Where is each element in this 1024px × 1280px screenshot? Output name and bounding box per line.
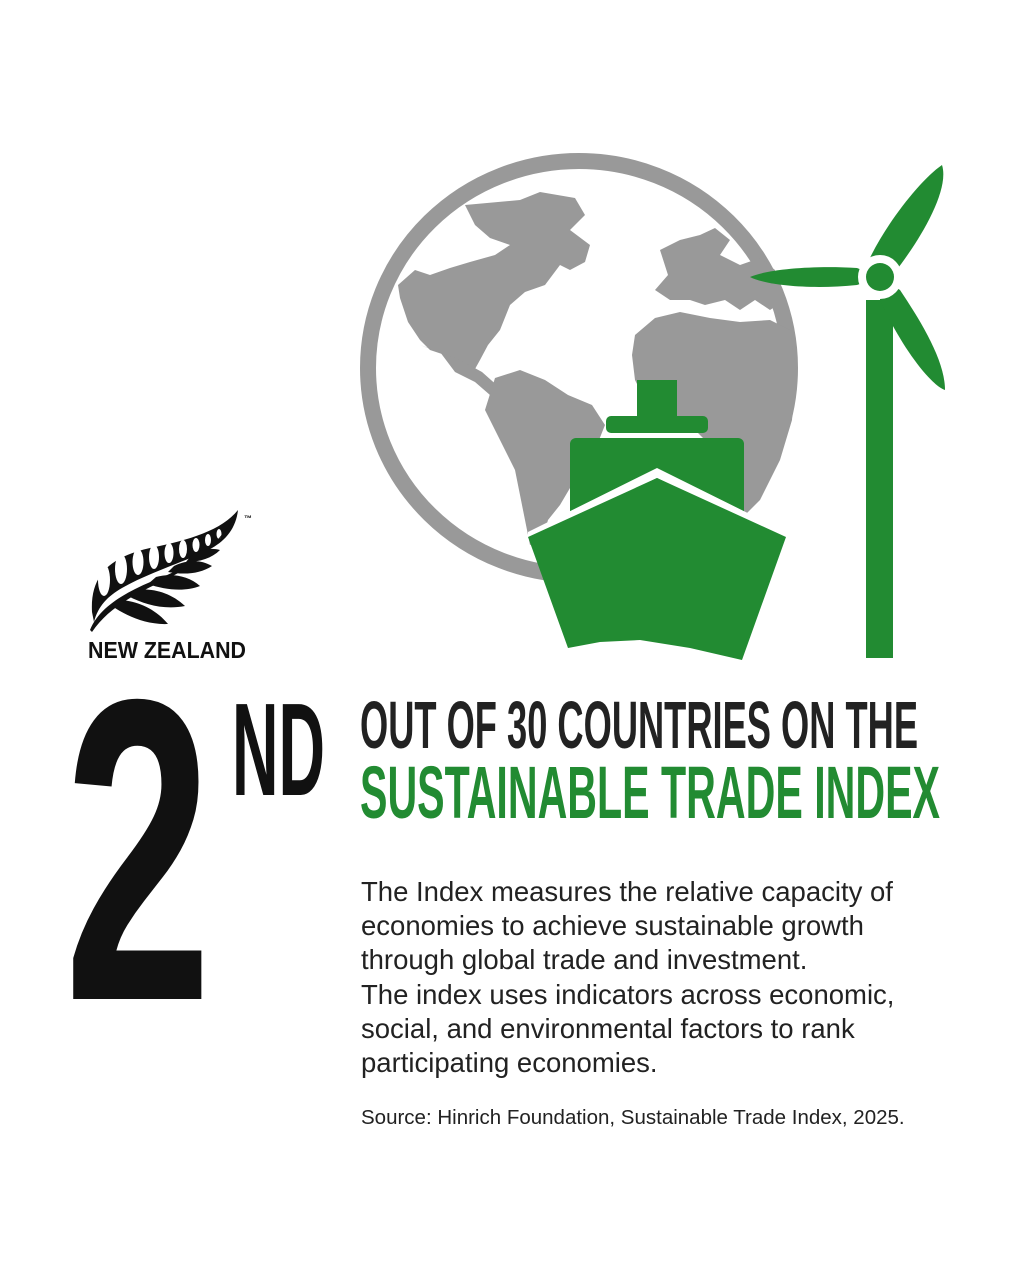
ranking number: 2	[64, 611, 212, 1091]
europe	[655, 228, 785, 310]
text: ND	[232, 676, 325, 823]
south america	[485, 370, 605, 545]
ship	[528, 380, 786, 660]
source note: Source: Hinrich Foundation, Sustainable Trade Index, 2025.	[361, 1106, 905, 1129]
logo: New Zealand fern: ™	[244, 514, 252, 523]
north america	[398, 192, 590, 378]
body text: economies to achieve sustainable growth	[361, 910, 864, 941]
body text: The Index measures the relative capacity of	[361, 876, 893, 907]
headline	[360, 688, 940, 834]
logo: New Zealand fern: NEW ZEALAND	[88, 637, 246, 663]
africa	[632, 312, 796, 520]
body text: social, and environmental factors to rank	[361, 1013, 855, 1044]
body text: through global trade and investment.	[361, 944, 807, 975]
body text: participating economies.	[361, 1047, 658, 1078]
globe	[368, 161, 796, 575]
wind turbine	[750, 165, 945, 658]
illustration: globe, ship and wind turbine	[368, 161, 945, 660]
logo: New Zealand fern	[88, 510, 252, 663]
body text: The index uses indicators across economic,	[361, 979, 894, 1010]
body text	[361, 876, 894, 1078]
